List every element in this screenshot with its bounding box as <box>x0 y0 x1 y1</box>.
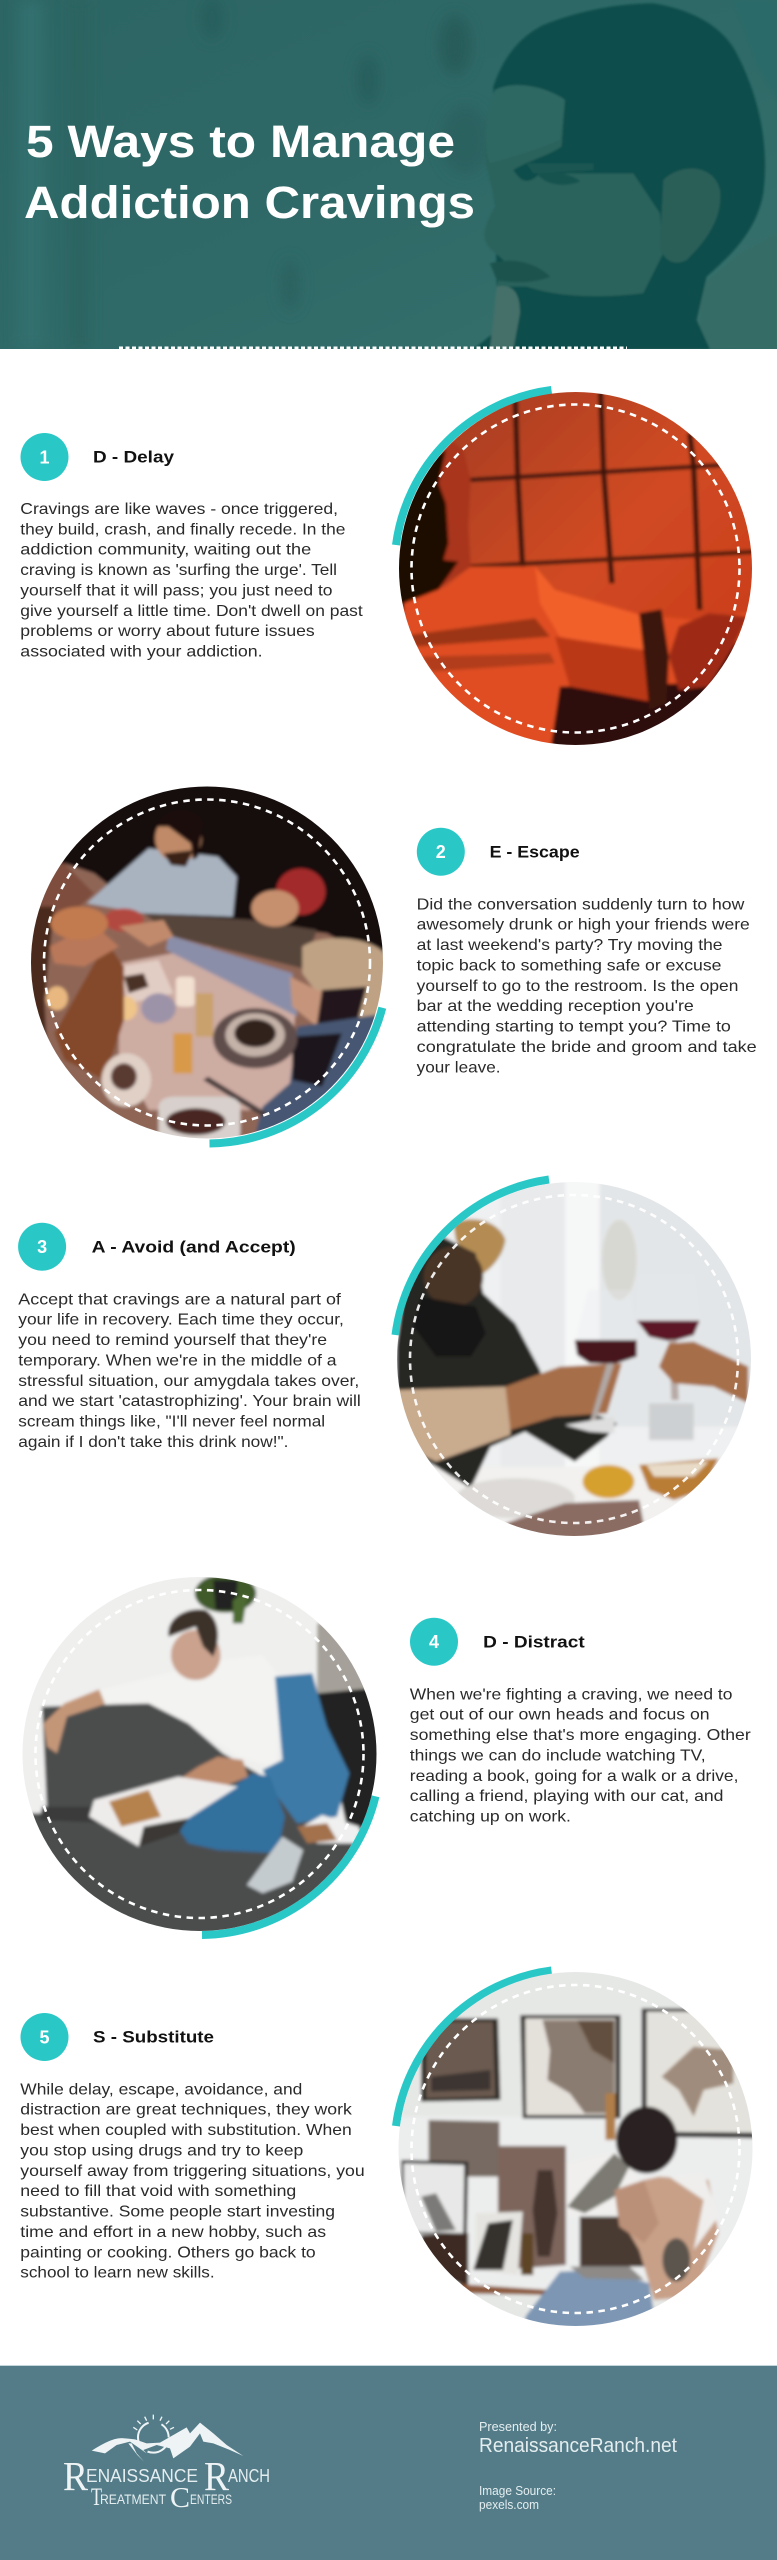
credits text: pexels.com <box>479 2497 539 2512</box>
body text 2: bar at the wedding reception you're <box>417 998 694 1015</box>
body text 5: yourself away from triggering situations, you <box>20 2163 365 2180</box>
credits text <box>479 2419 677 2512</box>
body text 3: stressful situation, our amygdala takes over, <box>18 1373 359 1390</box>
body text 5: While delay, escape, avoidance, and <box>20 2081 302 2098</box>
badge 2: 2 <box>436 842 446 862</box>
title: Addiction Cravings <box>24 177 475 228</box>
badge 3: 3 <box>37 1237 47 1257</box>
logo: Renaissance Ranch Treatment Centers: C <box>170 2483 190 2514</box>
header banner <box>0 0 777 349</box>
logo: Renaissance Ranch Treatment Centers: ENAISSANCE <box>86 2466 198 2486</box>
logo: Renaissance Ranch Treatment Centers: R <box>63 2453 89 2499</box>
body text 1: they build, crash, and finally recede. In the <box>20 521 346 538</box>
body text 5: school to learn new skills. <box>20 2265 215 2282</box>
body text 5: you stop using drugs and try to keep <box>20 2142 304 2159</box>
body text 1: Cravings are like waves - once triggered, <box>20 501 338 518</box>
body text 5: painting or cooking. Others go back to <box>20 2244 316 2261</box>
body text 5 <box>20 2081 365 2282</box>
body text 2: congratulate the bride and groom and take <box>417 1039 757 1056</box>
body text 1 <box>20 501 363 661</box>
icon: mountains and sun <box>92 2415 243 2462</box>
photo: wine glasses toasting <box>386 1173 763 1540</box>
section 3: avoid and accept <box>18 1173 763 1540</box>
body text 5: substantive. Some people start investing <box>20 2204 335 2220</box>
photo: artist painting among framed pictures <box>386 1963 763 2330</box>
body text 4: things we can do include watching TV, <box>410 1747 706 1764</box>
credits text: RenaissanceRanch.net <box>479 2434 677 2457</box>
body text 3: temporary. When we're in the middle of a <box>18 1352 337 1369</box>
badge 5 <box>20 2013 68 2061</box>
body text 5: need to fill that void with something <box>20 2183 296 2200</box>
logo: Renaissance Ranch Treatment Centers: ANCH <box>228 2466 270 2486</box>
badge 3 <box>18 1223 66 1271</box>
body text 1: give yourself a little time. Don't dwell on past <box>20 603 363 620</box>
body text 2: topic back to something safe or excuse <box>417 957 722 974</box>
section 1: delay <box>20 383 763 753</box>
photo: man reading magazine on sofa <box>10 1570 386 1937</box>
body text 1: problems or worry about future issues <box>20 623 315 640</box>
title: 5 Ways to Manage <box>26 116 455 167</box>
body text 2: awesomely drunk or high your friends were <box>417 917 750 934</box>
body text 3: your life in recovery. Each time they occur, <box>18 1312 344 1329</box>
body text 2: attending starting to tempt you? Time to <box>417 1018 731 1036</box>
body text 3 <box>18 1291 361 1451</box>
header photo: man in profile with teal overlay <box>0 0 777 349</box>
badge 4: 4 <box>429 1632 439 1652</box>
body text 4: When we're fighting a craving, we need to <box>410 1686 733 1703</box>
section 5: substitute <box>20 1963 763 2330</box>
body text 3: and we start 'catastrophizing'. Your brain will <box>18 1393 361 1410</box>
logo: Renaissance Ranch Treatment Centers <box>63 2415 270 2514</box>
body text 4 <box>410 1686 751 1826</box>
body text 3: scream things like, "I'll never feel normal <box>18 1414 325 1430</box>
body text 5: distraction are great techniques, they work <box>20 2102 352 2119</box>
body text 2: your leave. <box>417 1059 500 1076</box>
body text 4: something else that's more engaging. Other <box>410 1727 751 1744</box>
heading: E - Escape: E - Escape <box>490 844 580 862</box>
badge 4 <box>410 1618 458 1666</box>
body text 1: craving is known as 'surfing the urge'. Tell <box>20 562 337 579</box>
badge 5: 5 <box>39 2028 50 2048</box>
body text 2: at last weekend's party? Try moving the <box>417 937 723 954</box>
body text 4: calling a friend, playing with our cat, and <box>410 1788 724 1805</box>
photo: friends toasting at dinner table <box>20 780 396 1147</box>
heading: D - Distract: D - Distract <box>483 1634 585 1652</box>
credits text: Presented by: <box>479 2419 557 2434</box>
credits text: Image Source: <box>479 2483 556 2498</box>
section 2: escape <box>20 780 757 1147</box>
body text 2 <box>417 896 757 1076</box>
body text 4: get out of our own heads and focus on <box>410 1707 710 1724</box>
body text 5: best when coupled with substitution. When <box>20 2122 352 2139</box>
heading: S - Substitute: S - Substitute <box>93 2029 214 2047</box>
photo: man in red light <box>386 383 763 753</box>
title <box>24 116 475 228</box>
body text 5: time and effort in a new hobby, such as <box>20 2224 326 2241</box>
body text 4: reading a book, going for a walk or a drive, <box>410 1768 738 1785</box>
heading: D - Delay: D - Delay <box>93 448 175 466</box>
body text 1: addiction community, waiting out the <box>20 542 311 559</box>
heading: A - Avoid (and Accept): A - Avoid (and Accept) <box>92 1239 296 1257</box>
logo: Renaissance Ranch Treatment Centers: ENTERS <box>190 2491 232 2507</box>
logo: Renaissance Ranch Treatment Centers: REATMENT <box>100 2491 166 2507</box>
footer <box>0 2365 777 2560</box>
body text 4: catching up on work. <box>410 1808 571 1826</box>
body text 2: yourself to go to the restroom. Is the open <box>417 978 738 995</box>
logo: Renaissance Ranch Treatment Centers: R <box>204 2453 230 2499</box>
logo: Renaissance Ranch Treatment Centers: T <box>91 2484 102 2511</box>
badge 1: 1 <box>39 448 50 468</box>
badge 2 <box>417 828 465 876</box>
body text 3: you need to remind yourself that they're <box>18 1332 327 1349</box>
body text 1: yourself that it will pass; you just need to <box>20 582 333 600</box>
body text 3: again if I don't take this drink now!". <box>18 1434 288 1451</box>
badge 1 <box>20 433 68 481</box>
body text 3: Accept that cravings are a natural part of <box>18 1291 342 1308</box>
body text 2: Did the conversation suddenly turn to how <box>417 896 745 913</box>
section 4: distract <box>10 1570 751 1937</box>
body text 1: associated with your addiction. <box>20 644 263 661</box>
